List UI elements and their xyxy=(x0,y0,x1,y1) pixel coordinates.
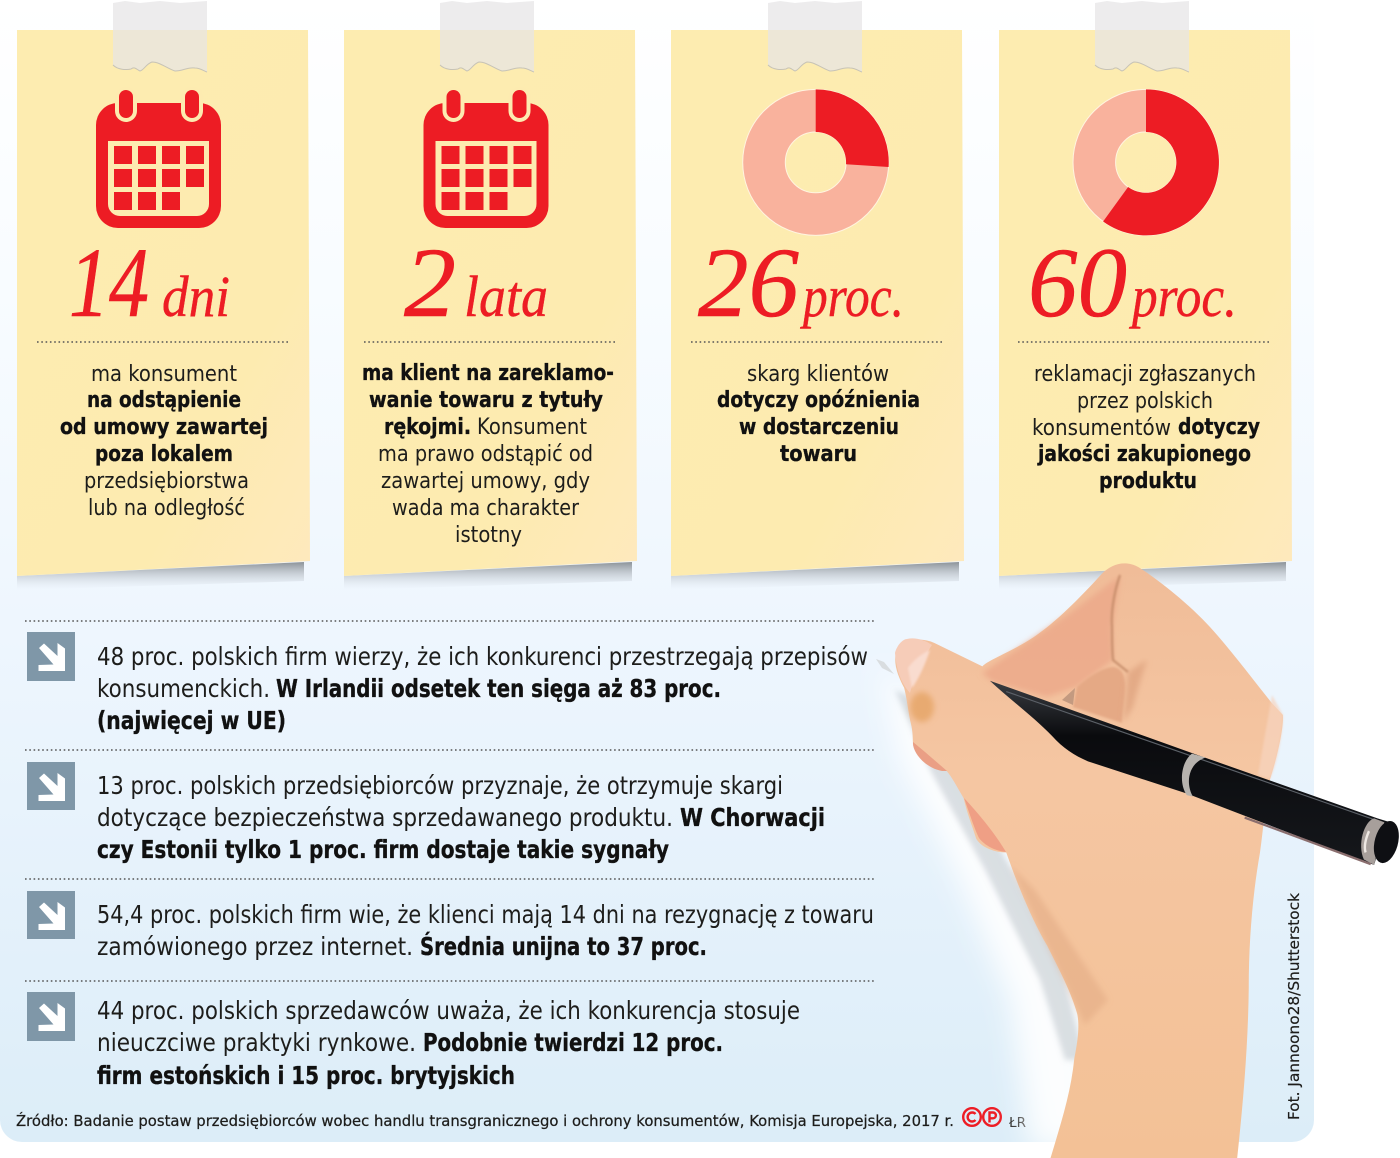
text: fact 2 xyxy=(97,771,825,864)
text: note 1 xyxy=(60,362,268,521)
figure: 60 proc. xyxy=(1028,227,1237,338)
text: note 1: przedsiębiorstwa xyxy=(84,469,249,494)
figure: 2 lata: lata xyxy=(464,264,548,329)
text: fact 3: 54,4 proc. polskich firm wie, że klienci mają 14 dni na rezygnację z towaru xyxy=(97,900,874,929)
fact 1 xyxy=(27,632,868,735)
text: note 3: w dostarczeniu xyxy=(739,415,899,440)
author initials: ŁR xyxy=(1008,1116,1026,1131)
text: note 2: istotny xyxy=(455,523,522,548)
donut chart: 26 percent xyxy=(743,89,889,235)
fact 4 xyxy=(27,992,800,1090)
text: fact 4: Podobnie twierdzi 12 proc. xyxy=(423,1028,723,1057)
text: fact 4: firm estońskich i 15 proc. brytyjskich xyxy=(97,1061,515,1090)
text: note 2: wada ma charakter xyxy=(392,496,580,521)
text: note 2: rękojmi. xyxy=(384,415,471,440)
text: note 2 xyxy=(362,361,614,548)
source note: Źródło: Badanie postaw przedsiębiorców wobec handlu transgranicznego i ochrony konsumentów, Komisja Europejska, 2017 r. xyxy=(16,1111,954,1130)
text: fact 4 xyxy=(97,996,800,1090)
icon: arrow 4 xyxy=(27,992,75,1041)
text: note 3 xyxy=(717,362,920,467)
text: note 1: lub na odległość xyxy=(88,496,245,521)
text: fact 3 xyxy=(97,900,874,961)
fact 2 xyxy=(27,762,825,864)
icon: calendar 2 xyxy=(424,87,548,228)
text: note 4: produktu xyxy=(1099,469,1197,494)
text: fact 1: konsumenckich. xyxy=(97,674,270,703)
text: note 3: skarg klientów xyxy=(747,362,889,387)
figure: 2 lata: 2 xyxy=(404,227,456,338)
figure: 26 proc.: proc. xyxy=(800,264,904,329)
text: fact 4: nieuczciwe praktyki rynkowe. xyxy=(97,1028,416,1057)
text: fact 1: 48 proc. polskich firm wierzy, że ich konkurenci przestrzegają przepisów xyxy=(97,642,868,671)
text: fact 2: czy Estonii tylko 1 proc. firm dostaje takie sygnały xyxy=(97,835,669,864)
text: note 4: dotyczy xyxy=(1178,415,1260,440)
text: note 3: dotyczy opóźnienia xyxy=(717,388,920,413)
text: note 4: przez polskich xyxy=(1077,389,1213,414)
icon: arrow 3 xyxy=(27,891,75,939)
text: fact 3: zamówionego przez internet. xyxy=(97,932,413,961)
donut chart: 60 percent xyxy=(1073,89,1219,235)
figure: 2 lata xyxy=(404,227,548,338)
text: note 2: zawartej umowy, gdy xyxy=(381,469,590,494)
text: note 2: Konsument xyxy=(477,415,587,440)
text: note 4: reklamacji zgłaszanych xyxy=(1034,362,1256,387)
text: fact 4: 44 proc. polskich sprzedawców uważa, że ich konkurencja stosuje xyxy=(97,996,800,1025)
text: note 2: ma klient na zareklamo- xyxy=(362,361,614,386)
figure: 14 dni xyxy=(69,227,230,338)
note 2 xyxy=(344,1,637,590)
icon: copyright marks xyxy=(963,1108,1001,1126)
text: fact 2: W Chorwacji xyxy=(680,803,825,832)
note 4 xyxy=(999,1,1292,590)
text: fact 1: (najwięcej w UE) xyxy=(97,706,286,735)
text: note 4: jakości zakupionego xyxy=(1037,442,1251,467)
tape 1 xyxy=(113,1,207,72)
tape 2 xyxy=(440,1,534,72)
text: note 1: na odstąpienie xyxy=(87,388,241,413)
text: fact 1 xyxy=(97,642,868,735)
figure: 14 dni: 14 xyxy=(69,227,149,338)
text: fact 3: Średnia unijna to 37 proc. xyxy=(420,931,707,961)
icon: calendar 1 xyxy=(96,87,221,228)
pen xyxy=(990,681,1400,867)
figure: 26 proc.: 26 xyxy=(698,227,799,338)
text: note 3: towaru xyxy=(780,442,857,467)
figure: 60 proc.: 60 xyxy=(1028,227,1127,338)
credit: photo: Fot. Jannoono28/Shutterstock xyxy=(1285,893,1303,1120)
figure: 60 proc.: proc. xyxy=(1128,264,1237,329)
text: fact 2: 13 proc. polskich przedsiębiorców przyznaje, że otrzymuje skargi xyxy=(97,771,783,800)
text: note 1: ma konsument xyxy=(91,362,237,387)
figure: 26 proc. xyxy=(698,227,904,338)
text: fact 2: dotyczące bezpieczeństwa sprzedawanego produktu. xyxy=(97,803,673,832)
icon: arrow 2 xyxy=(27,762,75,810)
note 1 xyxy=(17,1,310,590)
note 3 xyxy=(671,1,964,590)
tape 3 xyxy=(768,1,862,72)
illustration: hand holding pen xyxy=(876,563,1400,1158)
fact 3 xyxy=(27,891,874,961)
text: note 4 xyxy=(1032,362,1260,494)
icon: arrow 1 xyxy=(27,632,75,681)
text: note 4: konsumentów xyxy=(1032,416,1171,441)
text: note 1: poza lokalem xyxy=(95,442,233,467)
text: note 2: ma prawo odstąpić od xyxy=(378,442,593,467)
text: note 2: wanie towaru z tytuły xyxy=(369,388,603,413)
figure: 14 dni: dni xyxy=(162,264,230,329)
tape 4 xyxy=(1095,1,1189,72)
text: fact 1: W Irlandii odsetek ten sięga aż 83 proc. xyxy=(276,674,721,703)
text: note 1: od umowy zawartej xyxy=(60,415,268,440)
